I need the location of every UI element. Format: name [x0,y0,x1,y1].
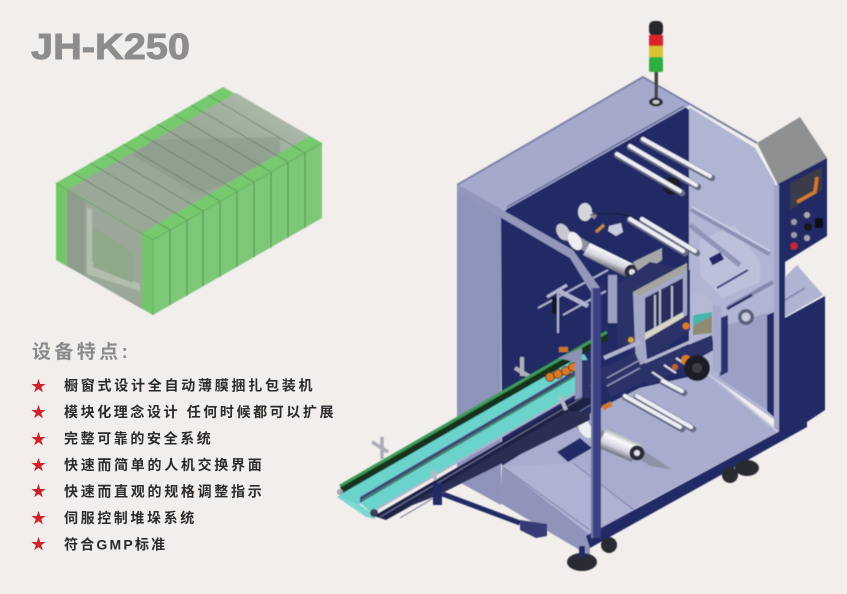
conveyor rear bracket [372,437,388,459]
feature 3: ★ [31,431,46,448]
feature 7: 符合GMP标准 [64,536,167,552]
right inner wall [689,107,775,420]
machine side wall [457,185,501,505]
conveyor [337,332,609,520]
feature 2: 模块化理念设计 任何时候都可以扩展 [64,404,336,420]
title: JH-K250 [31,26,190,67]
stack light [649,21,663,106]
feature 4: ★ [31,457,46,474]
feature 4: 快速而简单的人机交换界面 [64,457,264,473]
feature 3: 完整可靠的安全系统 [64,430,213,446]
feature 1: ★ [31,378,46,395]
base beam [586,422,807,548]
rear navy panel [501,106,707,466]
top cover [457,77,690,216]
feature 7: ★ [31,536,46,553]
left side mechanism [515,270,608,378]
feet and castors [567,460,759,571]
control cabinet [757,117,827,320]
feature 2: ★ [31,404,46,421]
right post [774,185,780,433]
feature list [31,378,336,553]
upper rods [617,139,712,253]
lower film roller [562,401,673,470]
support arm [440,493,520,523]
feature 5: 快速而直观的规格调整指示 [64,484,264,500]
handwheels [684,309,754,381]
lower rods [625,381,693,429]
feature 1: 橱窗式设计全自动薄膜捆扎包装机 [64,378,315,394]
product illustration: film-wrapped stack of green cartons [56,87,322,315]
feature 5: ★ [31,483,46,500]
upper film roller [553,203,640,280]
front frame beam and post [457,184,601,538]
feature 6: 伺服控制堆垛系统 [64,510,197,526]
heading: equipment features: 设备特点: [32,341,131,363]
central frame mechanism [599,248,721,397]
machine floor [502,373,778,533]
machine illustration [337,21,827,571]
right lower cabinet [785,296,825,434]
feature 6: ★ [31,510,46,527]
